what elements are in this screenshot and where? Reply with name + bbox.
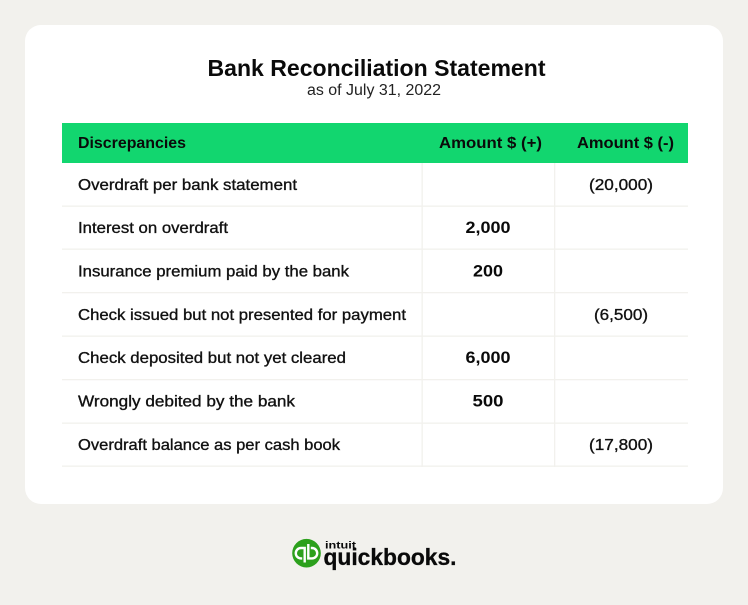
row: check issued: Check issued but not presented for payment <box>78 307 407 324</box>
panel: statement card <box>25 25 723 504</box>
title: Bank Reconciliation Statement <box>208 55 546 81</box>
row: insurance premium: 200 <box>473 262 503 280</box>
table header <box>62 123 688 163</box>
row: overdraft per bank statement: (20,000) <box>589 177 653 194</box>
icon: quickbooks mark <box>292 539 321 568</box>
row: wrongly debited: 500 <box>472 392 504 410</box>
row: check issued: (6,500) <box>594 307 648 324</box>
row: interest on overdraft: 2,000 <box>466 219 510 237</box>
row: interest on overdraft: Interest on overdraft <box>78 220 229 237</box>
row: overdraft balance: (17,800) <box>589 437 653 454</box>
logo: intuit quickbooks: quickbooks. <box>324 544 456 570</box>
wordmark: intuit <box>325 540 357 552</box>
row: interest on overdraft <box>78 219 510 237</box>
table header: Discrepancies <box>78 135 186 152</box>
row: check deposited <box>78 349 510 367</box>
table <box>62 123 688 467</box>
row: check deposited: Check deposited but not yet cleared <box>78 350 346 367</box>
row: wrongly debited <box>78 392 504 410</box>
table header: Amount $ (-) <box>577 135 674 152</box>
row: overdraft balance: Overdraft balance as per cash book <box>78 437 341 454</box>
logo: intuit quickbooks <box>292 539 456 570</box>
row: check issued <box>78 307 648 324</box>
row: wrongly debited: Wrongly debited by the bank <box>78 394 296 410</box>
subtitle: as of July 31, 2022 <box>307 82 441 99</box>
row: overdraft balance <box>78 437 653 454</box>
row: insurance premium <box>78 262 503 280</box>
row: check deposited: 6,000 <box>466 349 510 367</box>
row: overdraft per bank statement: Overdraft per bank statement <box>78 177 298 194</box>
table header: Amount $ (+) <box>439 135 542 152</box>
row: overdraft per bank statement <box>78 177 653 194</box>
row: insurance premium: Insurance premium paid by the bank <box>78 264 350 280</box>
